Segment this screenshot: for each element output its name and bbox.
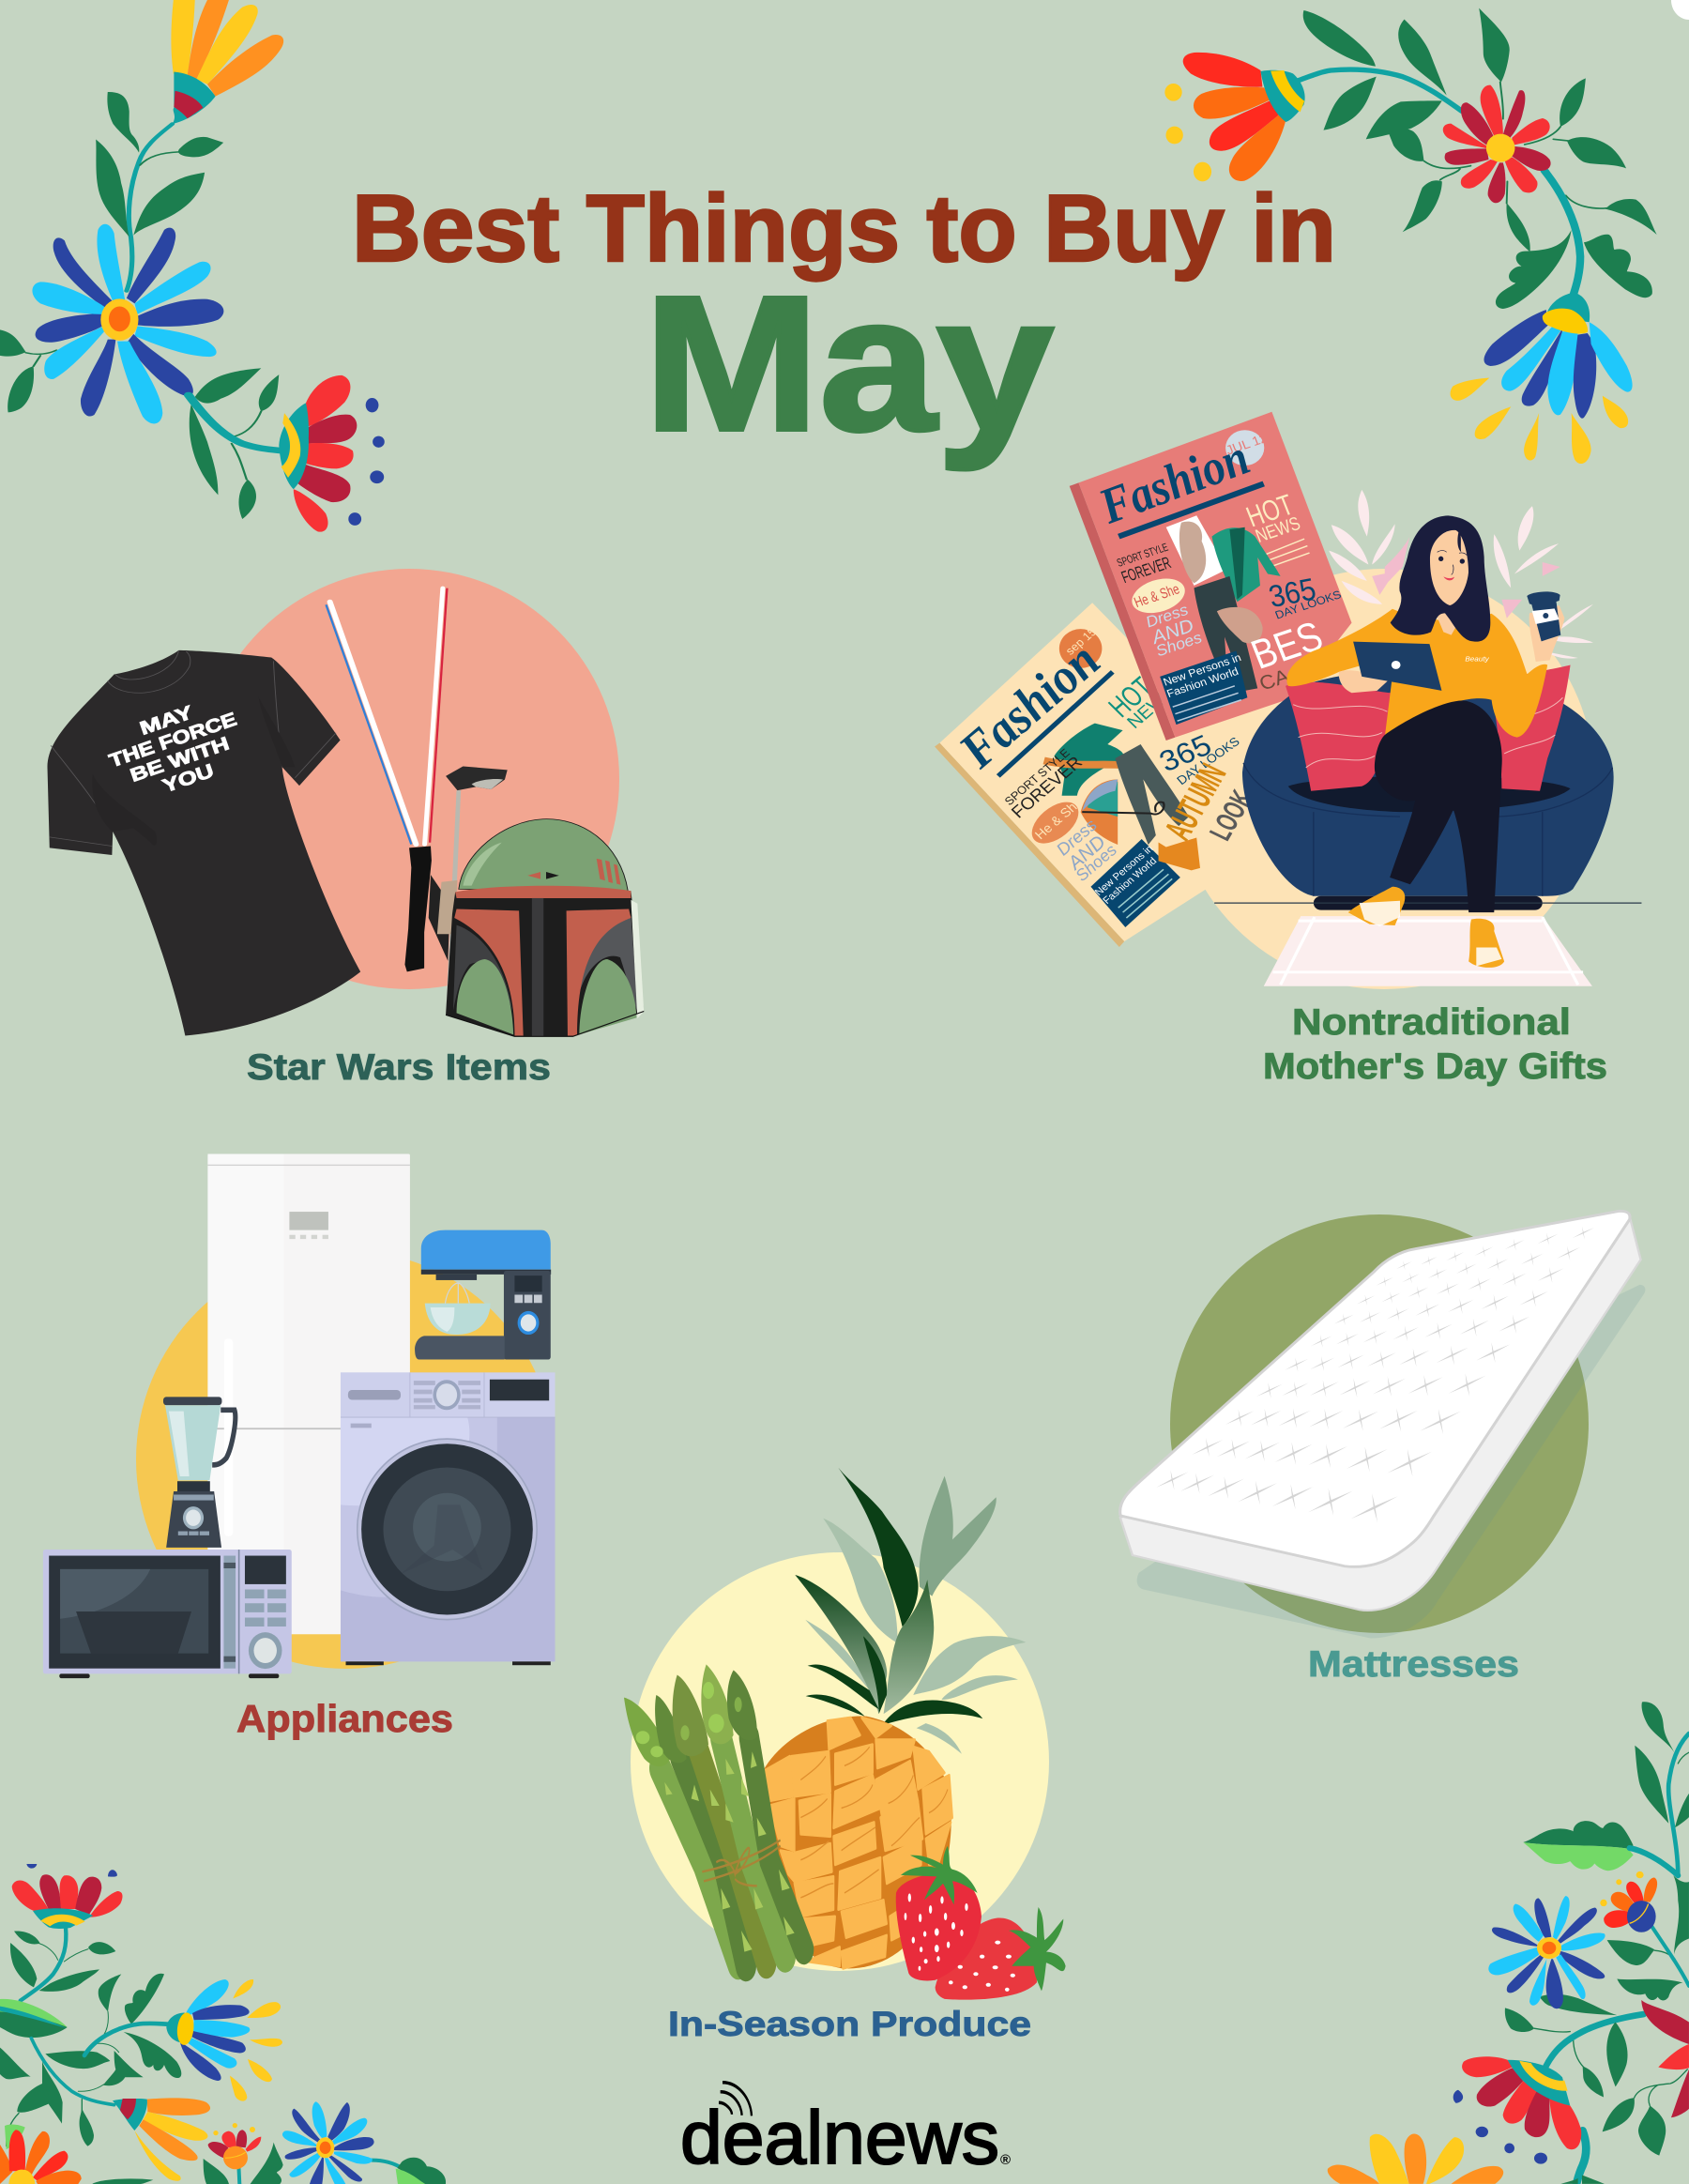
- strawberries: [896, 1846, 1066, 2000]
- icon: fashion magazines: FOREVER: [1007, 753, 1086, 821]
- logo: dealnews: dealnews: [680, 2096, 999, 2179]
- icon: fashion magazines: [935, 412, 1352, 947]
- icon: t-shirt: [47, 650, 360, 1036]
- icon: appliances group: [43, 1153, 555, 1678]
- panel: nontraditional Mother's Day gifts: [935, 412, 1641, 1087]
- label: Nontraditional Mother's Day Gifts: Nontraditional: [1292, 1002, 1571, 1043]
- panel: Star Wars items: [47, 569, 644, 1088]
- title line: Best Things to Buy in: Best Things to Buy in: [352, 176, 1336, 282]
- blender: [163, 1397, 236, 1548]
- icon: fashion magazines: NEW: [1123, 690, 1171, 733]
- icon: fashion magazines: AUTUMN: [1157, 758, 1235, 847]
- icon: lightsabers and helmet: [326, 588, 644, 1036]
- shirt slogan: BE WITH: [128, 733, 232, 787]
- icon: fashion magazines: New Persons in: [1093, 844, 1155, 898]
- label: Appliances: Appliances: [236, 1697, 453, 1740]
- panel: in-season produce: [624, 1468, 1066, 2043]
- icon: fashion magazines: FOREVER: [1118, 553, 1174, 587]
- shirt slogan: MAY: [137, 702, 196, 740]
- icon: fashion magazines: SPORT STYLE: [1002, 746, 1073, 808]
- label: Mattresses: Mattresses: [1308, 1644, 1519, 1685]
- icon: fashion magazines: 365: [1154, 728, 1217, 778]
- icon: fashion magazines: Fashion World: [1164, 664, 1240, 700]
- icon: fashion magazines: DAY LOOKS: [1174, 735, 1242, 787]
- floral corner: top right: [1164, 8, 1657, 464]
- stand mixer: [415, 1230, 551, 1360]
- floral corner: top left: [0, 0, 385, 532]
- icon: fashion magazines: Fashion: [947, 633, 1112, 779]
- icon: pineapple, asparagus, strawberries: [624, 1468, 1066, 2000]
- mattress tufting: [1156, 1227, 1594, 1522]
- label: In-Season Produce: In-Season Produce: [668, 2005, 1031, 2043]
- shirt slogan: THE FORCE: [107, 709, 239, 771]
- icon: fashion magazines: HOT: [1241, 488, 1298, 533]
- label: Nontraditional Mother's Day Gifts: Mother's Day Gifts: [1263, 1046, 1607, 1087]
- icon: fashion magazines: LOOK: [1203, 785, 1259, 846]
- floral corner: bottom left: [0, 1864, 446, 2184]
- icon: fashion magazines: Dress: [1052, 816, 1101, 859]
- floral corner: bottom right: [1328, 1702, 1689, 2184]
- panel: mattresses: [1120, 1211, 1645, 1685]
- title line: May: May: [644, 256, 1054, 471]
- microwave: [43, 1550, 292, 1678]
- pineapple body: [762, 1717, 952, 1968]
- woman's head, cup and hand: [1391, 515, 1564, 662]
- illustration: woman in chair: [1214, 490, 1641, 986]
- icon: fashion magazines: Fashion: [1090, 430, 1257, 535]
- icon: fashion magazines: Shoes: [1072, 841, 1120, 885]
- icon: fashion magazines: Fashion World: [1101, 856, 1159, 907]
- icon: fashion magazines: NEWS: [1253, 513, 1303, 547]
- icon: fashion magazines: BES: [1245, 613, 1329, 678]
- icon: fashion magazines: He & She: [1132, 581, 1182, 611]
- panel: appliances: [43, 1153, 555, 1740]
- illustration: woman in chair: Beauty: [1465, 655, 1490, 663]
- icon: fashion magazines: Dress: [1143, 600, 1191, 631]
- pineapple crown: [795, 1468, 1026, 1754]
- icon: fashion magazines: 365: [1266, 573, 1319, 615]
- shirt slogan: [100, 690, 253, 811]
- label: Star Wars Items: Star Wars Items: [247, 1047, 551, 1088]
- icon: fashion magazines: CA: [1256, 664, 1293, 695]
- icon: fashion magazines: HOT: [1102, 671, 1160, 724]
- icon: mattress: [1120, 1211, 1645, 1639]
- washing machine: [341, 1372, 555, 1665]
- icon: fashion magazines: AND: [1147, 616, 1197, 649]
- label: Nontraditional Mother's Day Gifts: [1263, 1002, 1607, 1087]
- icon: fashion magazines: JUL 12: [1224, 430, 1270, 457]
- icon: fashion magazines: sep 15: [1063, 625, 1099, 658]
- icon: fashion magazines: DAY LOOKS: [1273, 588, 1343, 621]
- icon: fashion magazines: Shoes: [1153, 628, 1205, 660]
- icon: fashion magazines: New Persons in: [1162, 651, 1243, 689]
- icon: fashion magazines: AND: [1062, 832, 1110, 875]
- shirt slogan: YOU: [160, 760, 217, 797]
- asparagus bunch: [624, 1664, 804, 1966]
- icon: fashion magazines: He & She: [1032, 795, 1086, 842]
- logo: dealnews: ®: [1000, 2152, 1011, 2168]
- icon: fashion magazines: SPORT STYLE: [1115, 541, 1170, 570]
- fridge: [207, 1153, 410, 1634]
